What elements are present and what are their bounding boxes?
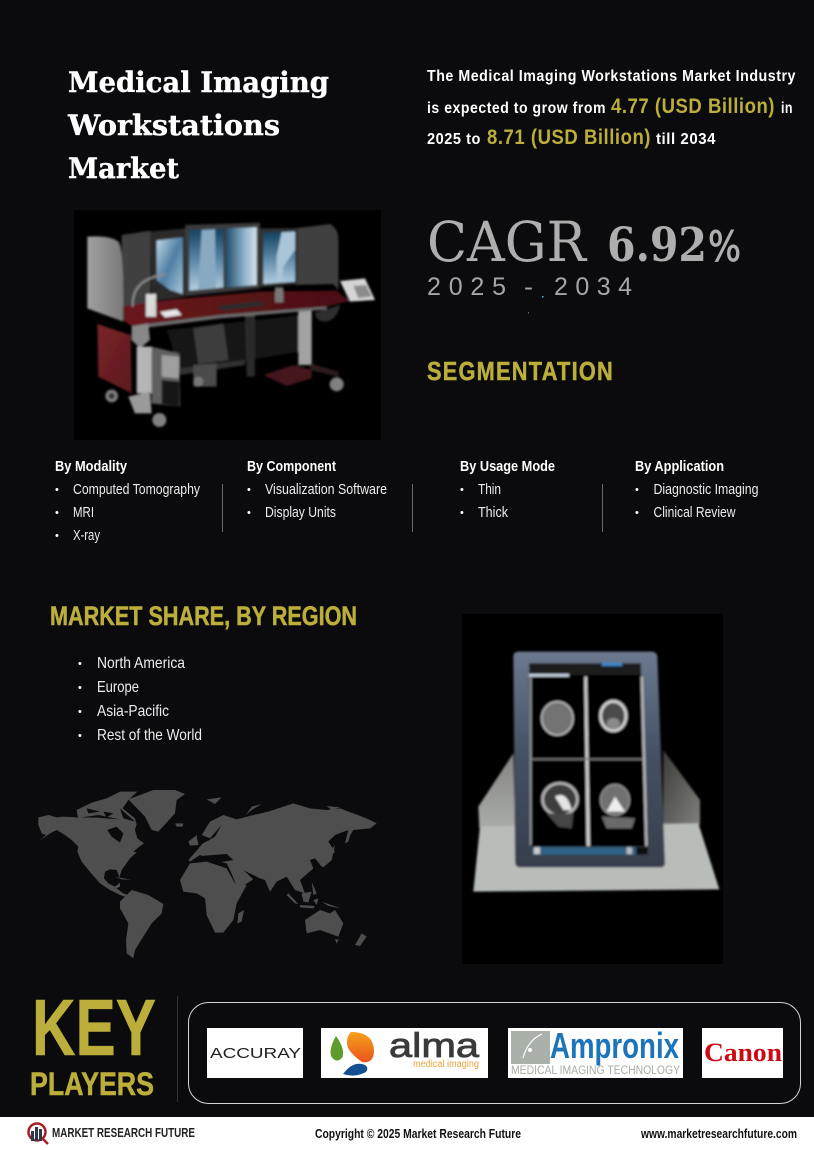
title: Medical Imaging bbox=[68, 66, 329, 99]
map: eurasia bbox=[188, 803, 377, 893]
icon: privacy panels bbox=[122, 224, 338, 307]
map: africa bbox=[180, 862, 247, 933]
market growth summary text: is expected to grow from bbox=[427, 100, 606, 117]
icon: telephone bbox=[340, 278, 375, 302]
segment column: by component bbox=[247, 458, 387, 521]
market growth summary text: in bbox=[781, 100, 793, 117]
CAGR figure: 6.92 bbox=[607, 218, 707, 273]
CAGR figure: CAGR bbox=[427, 210, 588, 274]
region list: Europe bbox=[97, 679, 139, 696]
logo: Accuray bbox=[207, 1028, 303, 1078]
CAGR figure bbox=[427, 210, 741, 274]
region list: North America bbox=[97, 655, 185, 672]
market growth summary text: till 2034 bbox=[656, 131, 716, 148]
segment column: by modality: X-ray bbox=[73, 527, 100, 544]
map: south america bbox=[120, 890, 163, 958]
market growth summary text: 2025 to bbox=[427, 131, 481, 148]
title: Market bbox=[68, 152, 179, 185]
CAGR period bbox=[427, 273, 632, 301]
map: north america bbox=[38, 815, 144, 897]
market growth summary text bbox=[427, 68, 796, 149]
logo: Ampronix bbox=[508, 1025, 683, 1078]
icon: cabinet bbox=[97, 324, 132, 393]
footer bar bbox=[0, 1117, 814, 1150]
segment column: by application: • bbox=[635, 507, 639, 519]
segmentation heading: SEGMENTATION bbox=[427, 356, 614, 386]
segment column: by modality: • bbox=[55, 507, 59, 519]
icon: tablet body bbox=[513, 652, 665, 867]
logo: Accuray: ACCURAY bbox=[210, 1045, 301, 1062]
CAGR period: 2025 bbox=[427, 273, 506, 301]
icon: tablet stand bbox=[478, 753, 515, 828]
segment column: by application: By Application bbox=[635, 458, 724, 475]
logo: Canon bbox=[702, 1028, 783, 1078]
segment column: by component: Display Units bbox=[265, 504, 336, 521]
icon: legs and computer tower bbox=[132, 323, 150, 348]
region list: • bbox=[78, 682, 82, 694]
title: Workstations bbox=[67, 109, 280, 142]
title bbox=[67, 66, 329, 185]
segment column: by modality: By Modality bbox=[55, 458, 128, 475]
segment column: by application: • bbox=[635, 484, 639, 496]
segment column: by component: • bbox=[247, 507, 251, 519]
segment column: by usage mode: Thin bbox=[478, 481, 501, 498]
logo: Ampronix: Ampronix bbox=[550, 1025, 679, 1066]
region list: • bbox=[78, 730, 82, 742]
logo: Alma medical imaging: medical imaging bbox=[413, 1059, 479, 1070]
region list: Asia-Pacific bbox=[97, 703, 169, 720]
segment column: by application: Clinical Review bbox=[654, 504, 736, 521]
world map bbox=[38, 790, 377, 958]
region list: • bbox=[78, 658, 82, 670]
photo: radiology workstation desk bbox=[74, 210, 381, 440]
CAGR figure: % bbox=[708, 222, 741, 271]
CAGR period: - bbox=[524, 273, 533, 301]
segment column: by usage mode: • bbox=[460, 484, 464, 496]
region list: • bbox=[78, 706, 82, 718]
region list bbox=[78, 655, 202, 744]
icon: monitors bbox=[151, 228, 186, 302]
segment column: by usage mode bbox=[460, 458, 555, 521]
logo: Alma medical imaging: alma bbox=[389, 1027, 479, 1065]
segment column: by modality: • bbox=[55, 530, 59, 542]
map: greenland bbox=[128, 790, 185, 832]
icon: desk top bbox=[124, 291, 349, 326]
segment column: by application bbox=[635, 458, 758, 521]
map: australia and new zealand bbox=[305, 910, 343, 937]
key players heading: KEY bbox=[32, 983, 156, 1072]
segment column: by application: Diagnostic Imaging bbox=[654, 481, 758, 498]
CAGR period: 2034 bbox=[554, 273, 632, 301]
map: caribbean bbox=[115, 877, 132, 880]
segment column: by usage mode: Thick bbox=[478, 504, 508, 521]
segment column: by component: By Component bbox=[247, 458, 336, 475]
segment column: by component: Visualization Software bbox=[265, 481, 387, 498]
segment column: by usage mode: • bbox=[460, 507, 464, 519]
photo: tablet showing brain scans bbox=[462, 614, 723, 964]
key players heading: PLAYERS bbox=[30, 1066, 154, 1102]
map: arctic archipelago bbox=[77, 792, 137, 825]
segment column: by component: • bbox=[247, 484, 251, 496]
market growth summary text: 8.71 (USD Billion) bbox=[487, 126, 651, 149]
icon: under-desk structure bbox=[167, 315, 300, 372]
key players frame bbox=[188, 1002, 800, 1104]
segment column: by modality: Computed Tomography bbox=[73, 481, 200, 498]
map: asia pacific islands bbox=[320, 845, 335, 867]
segment column: by modality bbox=[55, 458, 200, 544]
logo: Ampronix: MEDICAL IMAGING TECHNOLOGY bbox=[511, 1063, 680, 1077]
logo: Canon: Canon bbox=[704, 1038, 783, 1067]
region list: Rest of the World bbox=[97, 727, 202, 744]
icon: tablet toolbar bbox=[533, 847, 636, 855]
market share heading: MARKET SHARE, BY REGION bbox=[50, 601, 357, 631]
segment column: by modality: MRI bbox=[73, 504, 94, 521]
logo: Alma medical imaging bbox=[321, 1027, 488, 1078]
icon: brain scan slices bbox=[542, 702, 573, 735]
footer: copyright: Copyright © 2025 Market Research Future bbox=[315, 1126, 521, 1141]
market growth summary text: 4.77 (USD Billion) bbox=[611, 95, 775, 118]
footer: brand name: MARKET RESEARCH FUTURE bbox=[52, 1125, 195, 1140]
segment column: by usage mode: By Usage Mode bbox=[460, 458, 555, 475]
segment column: by modality: • bbox=[55, 484, 59, 496]
icon: market research future logo bbox=[28, 1124, 48, 1144]
key players heading bbox=[30, 983, 156, 1102]
